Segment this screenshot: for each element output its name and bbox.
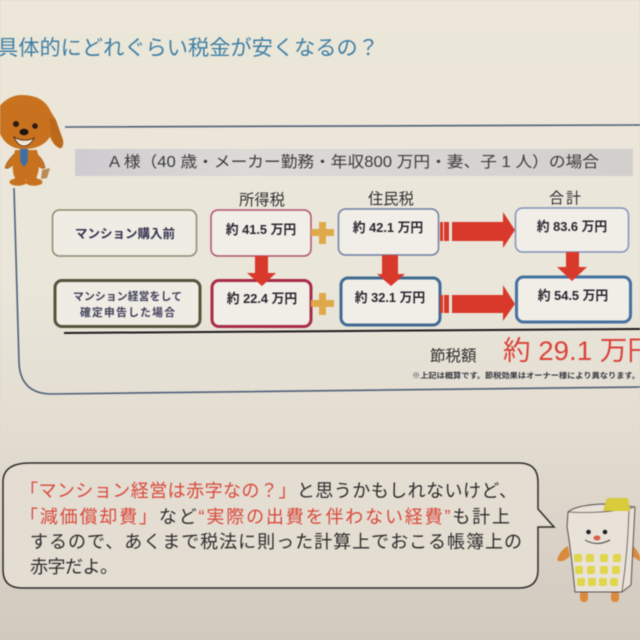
heading band: customer profile	[75, 149, 633, 176]
icon: plus top	[311, 222, 334, 244]
value box: income tax after	[212, 280, 311, 326]
bubble text line 4: 赤字だよ。	[30, 557, 118, 577]
arrow: resident tax down	[377, 255, 405, 286]
row label: before purchase: マンション購入前	[75, 226, 175, 241]
arrow: income tax down	[247, 256, 276, 286]
value box: total after	[516, 277, 630, 322]
value box: income tax before: 約 41.5 万円	[226, 222, 296, 237]
icon: dog mascot	[0, 95, 63, 186]
divider line	[64, 329, 640, 333]
value box: total before: 約 83.6 万円	[537, 219, 607, 234]
value box: total after: 約 54.5 万円	[538, 288, 608, 303]
arrow: top right	[440, 212, 515, 248]
icon: plus bottom	[311, 293, 334, 315]
column heading: resident tax: 住民税	[368, 191, 414, 208]
value box: resident tax after: 約 32.1 万円	[355, 290, 425, 305]
value box: income tax after: 約 22.4 万円	[227, 291, 297, 306]
heading band: customer profile: A 様（40 歳・メーカー勤務・年収800 万円・妻、子 1 人）の場合	[109, 153, 600, 171]
row label: before purchase	[52, 210, 196, 256]
bubble text line 1: 「マンション経営は赤字なの？」と思うかもしれないけど、	[20, 481, 517, 501]
column heading: total: 合 計	[549, 190, 581, 207]
row label: after filing: 確定申告した場合	[80, 305, 175, 319]
title: 具体的にどれぐらい税金が安くなるの？	[0, 37, 379, 60]
row label: after filing	[55, 280, 200, 326]
arrow: bottom right	[440, 285, 515, 321]
arrow: total down	[557, 252, 587, 281]
value box: resident tax before	[338, 209, 438, 255]
value box: resident tax after	[341, 278, 440, 325]
panel: tax example frame	[14, 125, 640, 394]
value box: resident tax before: 約 42.1 万円	[353, 220, 423, 235]
speech bubble	[3, 463, 554, 588]
label: tax savings: 節税額	[430, 347, 477, 365]
value box: total before	[516, 208, 628, 252]
row label: after filing: マンション経営をして	[73, 289, 182, 303]
column heading: income tax: 所得税	[239, 192, 285, 209]
value box: income tax before	[211, 210, 311, 256]
bubble text line 2: 「減価償却費」など“実際の出費を伴わない経費”も計上	[20, 507, 510, 527]
footnote: ※上記は概算です。節税効果はオーナー様により異なります。	[412, 370, 640, 380]
icon: building mascot	[557, 498, 640, 602]
bubble text line 3: するので、あくまで税法に則った計算上でおこる帳簿上の	[30, 532, 522, 552]
